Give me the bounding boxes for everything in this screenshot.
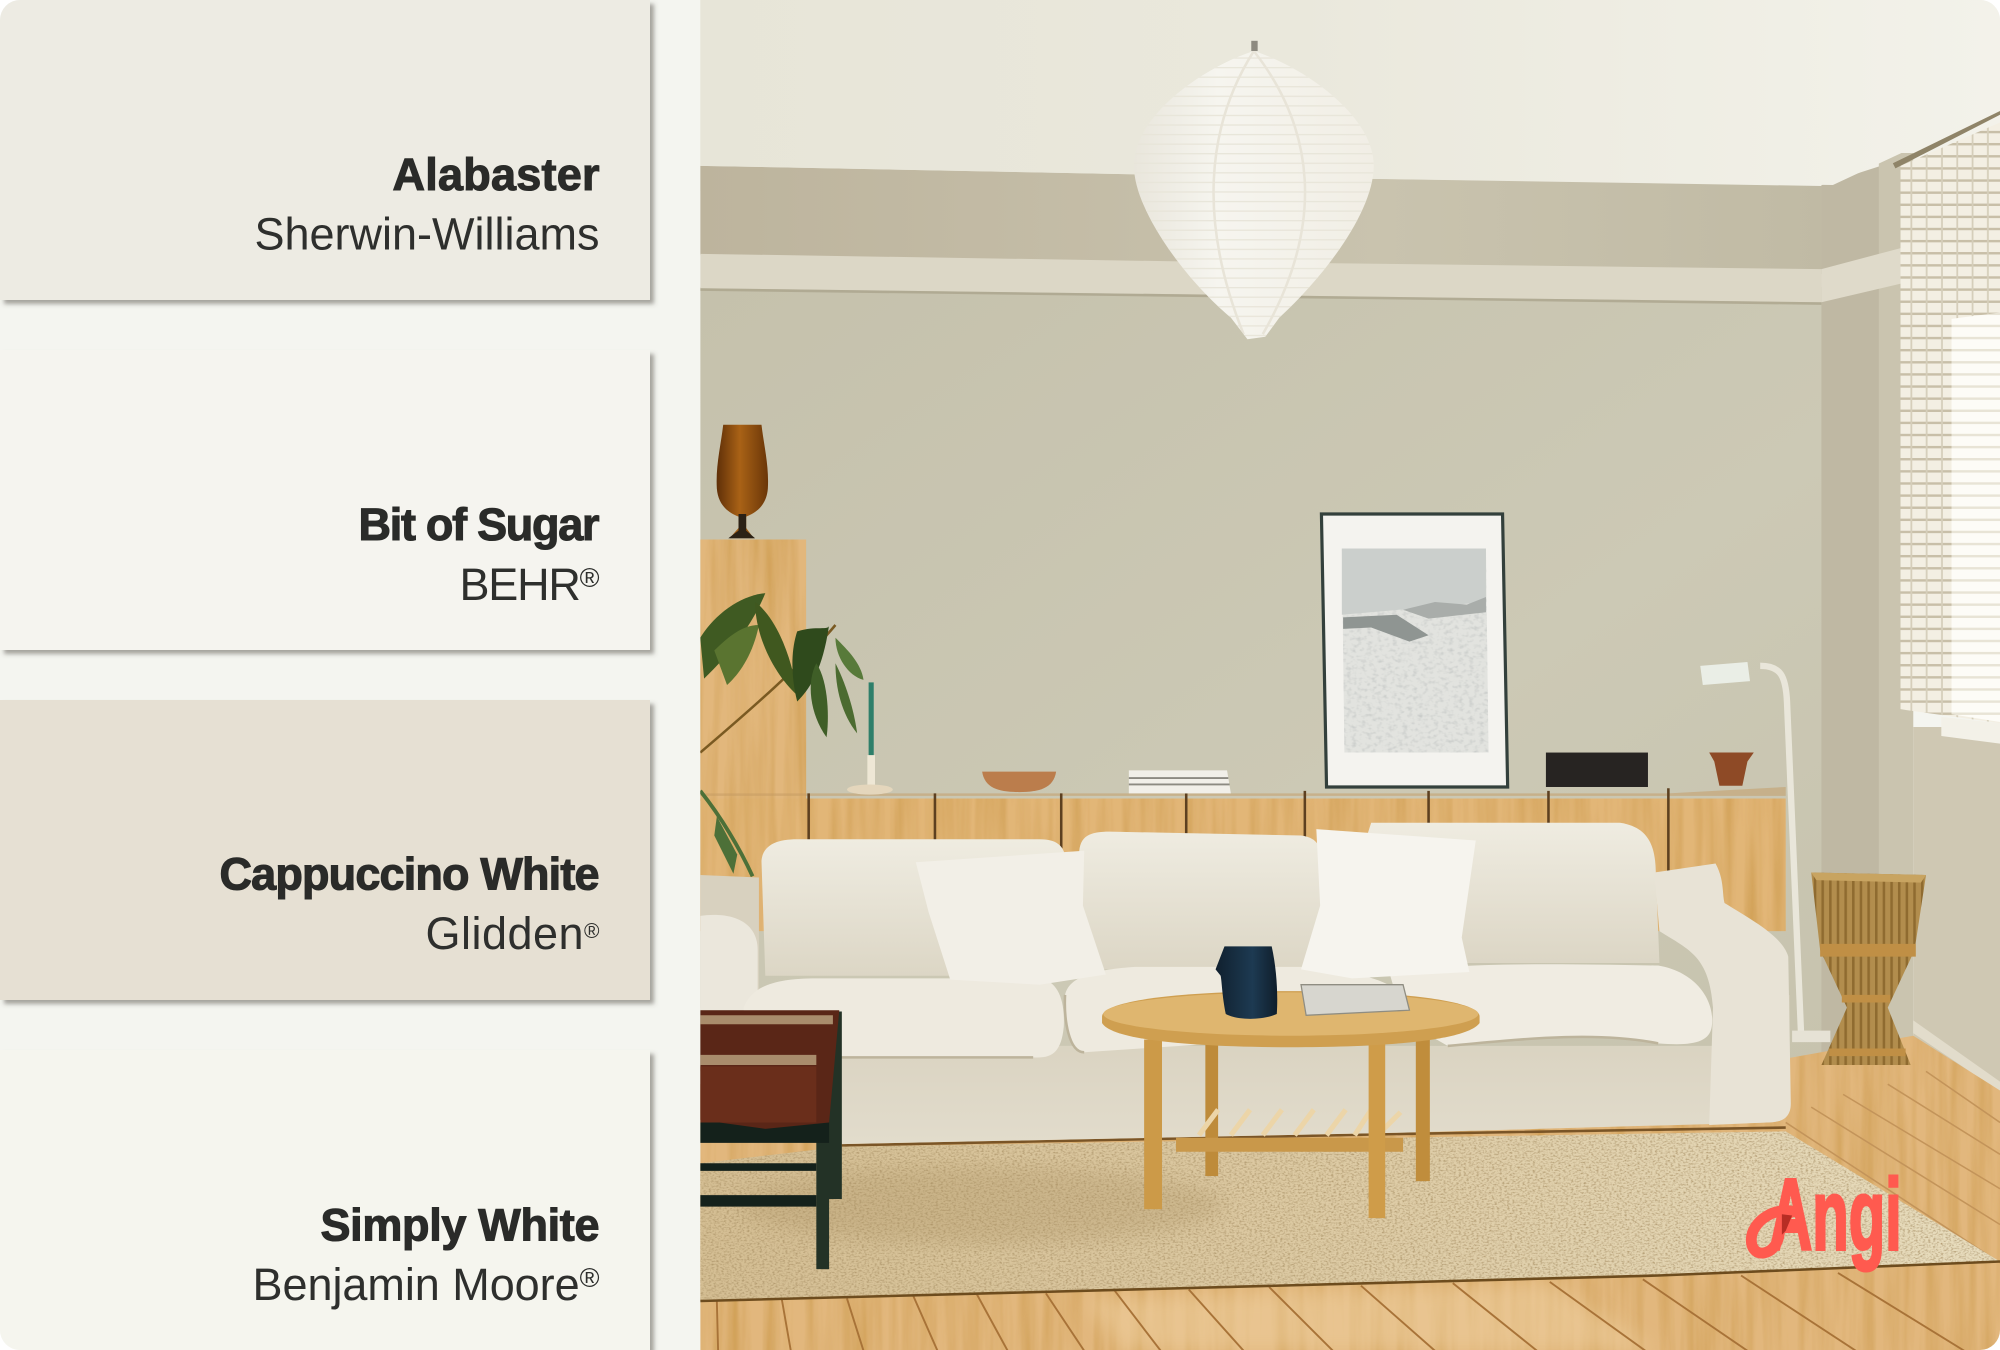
seat cushion middle: [1065, 967, 1403, 1052]
rug shadow under table: [740, 1167, 1224, 1244]
sofa back cushion left: [761, 839, 1069, 976]
colour name: Bit of Sugar: Bit of Sugar: [358, 499, 600, 550]
paper pendant lamp: [1129, 41, 1384, 344]
leather stool: [700, 1010, 842, 1269]
coffee table: [1102, 991, 1480, 1218]
sofa back cushion middle: [1079, 832, 1321, 969]
framed art: [1321, 514, 1508, 787]
brand: BEHR: ®: [580, 563, 600, 593]
brand: Benjamin Moore: ®: [580, 1263, 600, 1293]
sofa left side: [700, 875, 759, 1008]
window blinds: [1893, 111, 2000, 744]
brand: Sherwin-Williams: Sherwin-Williams: [254, 208, 600, 260]
photo: living room: [700, 0, 2000, 1350]
colour name: Alabaster: Alabaster: [392, 149, 600, 200]
navy jug: [1216, 946, 1277, 1019]
pillow right: [1301, 829, 1476, 978]
seat cushion right: [1390, 964, 1712, 1046]
horizontal beam: [700, 254, 1821, 302]
right wall: [1913, 727, 2000, 1097]
swatch: Cappuccino White: [0, 700, 650, 1000]
table books: [1301, 985, 1409, 1015]
black speaker: [1546, 753, 1648, 787]
brand logo: Angi: Angi: [1769, 1159, 1902, 1271]
colour name: Simply White: Simply White: [320, 1200, 600, 1250]
wicker basket stand: [1811, 872, 1926, 1065]
brand: Glidden: Glidden: [426, 908, 584, 959]
brand logo: Angi: [1751, 1159, 1902, 1271]
sofa: [700, 823, 1791, 1144]
pillow left: [916, 851, 1106, 985]
upper wall band: [700, 166, 1837, 274]
candle: [847, 682, 893, 795]
seat cushion left: [744, 978, 1064, 1058]
brand: Glidden: ®: [584, 920, 600, 943]
colour name: Cappuccino White: Cappuccino White: [220, 848, 600, 900]
tall wood cabinet: [700, 540, 806, 801]
ceiling: [1432, 164, 1878, 186]
swatch: Simply White: [256, 1052, 656, 1350]
brand: Benjamin Moore: Benjamin Moore: [252, 1259, 580, 1310]
right wall column: [1821, 166, 1879, 1052]
brown cup: [1709, 753, 1754, 786]
vase: [717, 425, 768, 538]
stacked books: [1129, 770, 1231, 793]
sofa right arm: [1654, 864, 1791, 1125]
bowl: [982, 772, 1056, 792]
wooden floor: [700, 1036, 2000, 1350]
table shelf: [1176, 1138, 1403, 1152]
plant: [700, 593, 864, 876]
sideboard: [700, 787, 1786, 931]
swatch: Bit of Sugar: [0, 350, 650, 650]
sofa base: [835, 995, 1790, 1144]
swatch: Alabaster: [0, 0, 650, 300]
floor lamp: [1700, 662, 1830, 1042]
jute rug: [700, 1131, 2000, 1301]
ceiling edge: [700, 153, 1902, 185]
sofa back cushion right: [1327, 823, 1659, 963]
panel: paint swatches: [0, 0, 650, 1350]
main wall: [700, 287, 1824, 1071]
brand: BEHR: BEHR: [460, 559, 581, 610]
